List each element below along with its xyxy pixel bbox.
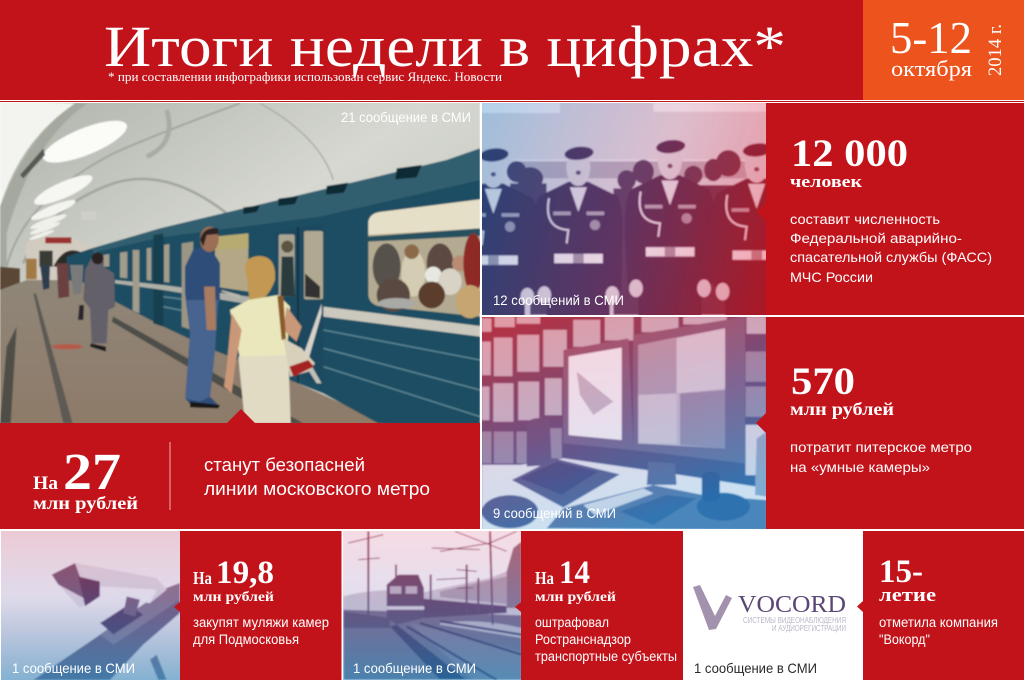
logo wordmark: VOCORD	[738, 592, 846, 618]
panel: cctv room photo	[480, 315, 770, 532]
description: станут безопасней	[204, 455, 365, 475]
date box	[863, 0, 1024, 100]
number: летие	[879, 585, 936, 606]
number: млн рублей	[790, 399, 894, 419]
number	[790, 132, 908, 191]
panel: smart cameras fact	[756, 317, 1024, 529]
panel: fines fact	[515, 531, 683, 680]
media count: camera: 1 сообщение в СМИ	[12, 660, 135, 676]
description: спасательной службы (ФАСС)	[790, 249, 992, 265]
pointer	[227, 409, 255, 423]
number: На	[193, 568, 212, 588]
description	[193, 615, 329, 647]
pointer	[515, 602, 521, 612]
media count: 9: 9 сообщений в СМИ	[493, 505, 616, 521]
description	[790, 439, 972, 475]
number	[33, 444, 138, 513]
number: 27	[63, 444, 121, 501]
media count: 21: 21 сообщение в СМИ	[341, 109, 471, 125]
panel: soldiers photo	[482, 103, 766, 315]
description: транспортные субъекты	[535, 649, 677, 664]
description: составит численность	[790, 211, 940, 227]
title: Итоги недели в цифрах*	[104, 14, 786, 79]
panel: rescue service fact	[757, 103, 1024, 315]
number: 570	[791, 360, 855, 403]
logo tagline	[743, 616, 846, 633]
description: МЧС России	[790, 269, 873, 285]
number: млн рублей	[535, 590, 616, 605]
number: млн рублей	[193, 590, 274, 605]
number: 19,8	[216, 555, 274, 591]
number	[535, 555, 616, 605]
description: линии московского метро	[204, 479, 430, 499]
panel: dummy cameras fact	[174, 531, 341, 680]
description	[204, 455, 430, 499]
media count: vocord: 1 сообщение в СМИ	[694, 660, 817, 676]
number: На	[535, 568, 554, 588]
description	[879, 615, 998, 647]
number: 14	[559, 555, 590, 591]
description: на «умные камеры»	[790, 459, 930, 475]
media count: train: 1 сообщение в СМИ	[353, 660, 476, 676]
panel: metro photo	[0, 100, 484, 430]
icon: vocord V mark	[693, 585, 732, 630]
number: млн рублей	[33, 493, 138, 513]
pointer	[756, 413, 766, 433]
number: 15-	[879, 554, 923, 590]
panel: anniversary fact	[857, 531, 1024, 680]
pointer	[757, 202, 766, 221]
description: потратит питерское метро	[790, 439, 972, 455]
description: Ространснадзор	[535, 632, 631, 647]
pointer	[174, 602, 180, 612]
number	[879, 554, 936, 606]
description: отметила компания	[879, 615, 998, 630]
red edge left of logo	[680, 531, 683, 680]
date range: 5-12	[890, 12, 972, 63]
panel: camera photo	[0, 528, 182, 680]
number: На	[33, 473, 59, 494]
panel: vocord logo	[683, 531, 863, 680]
number: 12 000	[791, 132, 908, 175]
year: 2014 г.	[985, 24, 1006, 76]
panel: train photo	[340, 528, 522, 680]
number: человек	[790, 172, 862, 191]
media count: 12: 12 сообщений в СМИ	[493, 292, 624, 308]
panel: metro fact	[0, 409, 480, 529]
header band	[0, 0, 863, 100]
description: для Подмосковья	[193, 632, 299, 647]
number	[790, 360, 894, 419]
divider strip	[0, 101, 1024, 102]
description: оштрафовал	[535, 615, 609, 630]
description	[535, 615, 677, 664]
logo tagline: СИСТЕМЫ ВИДЕОНАБЛЮДЕНИЯ	[743, 616, 846, 625]
pointer	[857, 601, 863, 612]
description: закупят муляжи камер	[193, 615, 329, 630]
number	[193, 555, 274, 605]
logo tagline: И АУДИОРЕГИСТРАЦИИ	[772, 624, 846, 633]
description: Федеральной аварийно-	[790, 230, 962, 246]
month: октября	[891, 56, 972, 81]
subtitle note: * при составлении инфографики использован сервис Яндекс. Новости	[108, 69, 502, 84]
description	[790, 211, 992, 285]
description: "Вокорд"	[879, 632, 930, 647]
